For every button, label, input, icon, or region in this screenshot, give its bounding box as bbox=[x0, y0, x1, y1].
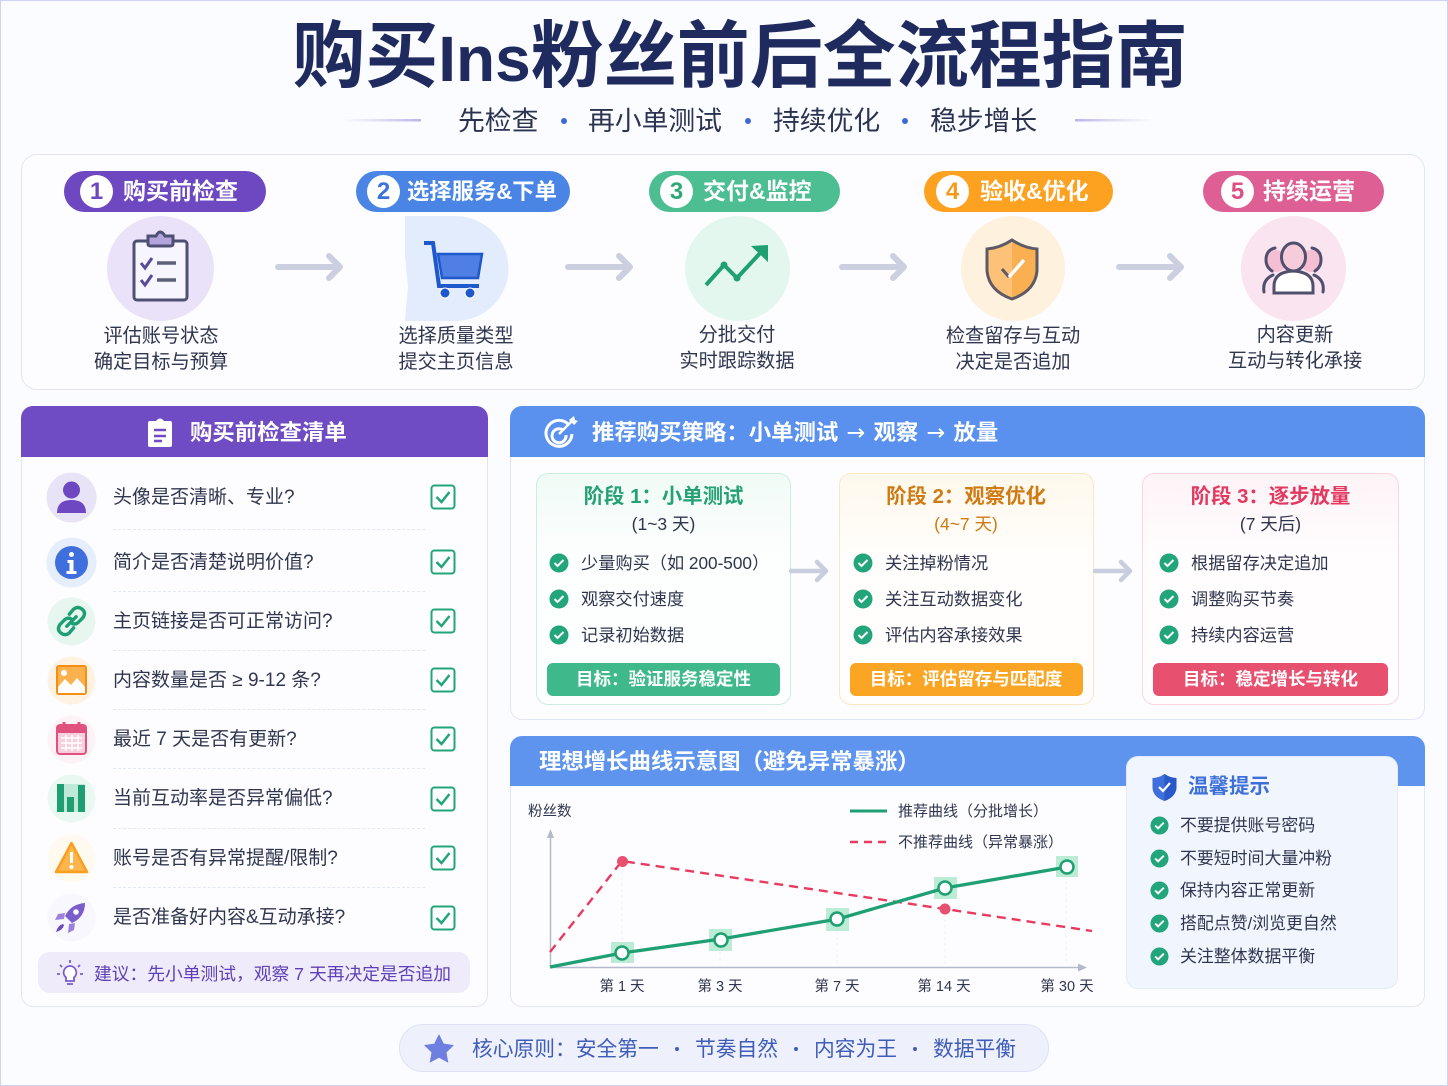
row 2 bbox=[46, 538, 456, 588]
card: stage 2: 阶段 2：观察优化 bbox=[886, 486, 1046, 508]
icon: cart bbox=[405, 216, 508, 321]
strategy header bbox=[510, 406, 1425, 457]
row text: 头像是否清晰、专业? bbox=[113, 487, 295, 508]
card: stage 1 bbox=[536, 473, 791, 705]
row 5 bbox=[48, 716, 456, 764]
row 4 bbox=[48, 656, 456, 704]
icon: bar chart bbox=[48, 774, 96, 822]
step 5 badge bbox=[1203, 171, 1384, 212]
check bbox=[1159, 553, 1179, 573]
row text: 账号是否有异常提醒/限制? bbox=[113, 848, 338, 869]
card: stage 2: (4~7 天) bbox=[934, 514, 998, 534]
check bbox=[1150, 914, 1169, 933]
check bbox=[852, 589, 872, 609]
x axis labels: 第 3 天 bbox=[697, 977, 743, 995]
step 2 badge: 选择服务&下单 bbox=[407, 179, 557, 204]
step 3 caption bbox=[679, 324, 795, 372]
chart header bbox=[510, 736, 1425, 786]
row 3 bbox=[48, 598, 456, 646]
step 1 badge: 购买前检查 bbox=[123, 178, 238, 204]
step 4 badge: 4 bbox=[946, 178, 959, 205]
icon: users bbox=[1241, 216, 1346, 321]
panel: tips: 搭配点赞/浏览更自然 bbox=[1180, 914, 1337, 933]
card: stage 1: (1~3 天) bbox=[632, 514, 695, 534]
footer: core principles bbox=[399, 1024, 1049, 1072]
step 1 badge bbox=[64, 171, 266, 212]
icon: rocket bbox=[55, 903, 85, 933]
row text: 最近 7 天是否有更新? bbox=[113, 729, 297, 750]
axes bbox=[547, 829, 1087, 972]
step 2 badge bbox=[356, 171, 570, 212]
check bbox=[1159, 589, 1179, 609]
icon: star bbox=[423, 1033, 455, 1063]
strategy header: 推荐购买策略：小单测试 → 观察 → 放量 bbox=[592, 420, 998, 446]
arrow bbox=[1116, 253, 1184, 281]
checkbox bbox=[430, 726, 456, 752]
check bbox=[1150, 881, 1169, 900]
card: stage 3: 持续内容运营 bbox=[1191, 624, 1294, 644]
arrow bbox=[565, 253, 633, 281]
row text: 是否准备好内容&互动承接? bbox=[113, 907, 345, 928]
footer: core principles: 核心原则：安全第一 bbox=[472, 1038, 659, 1061]
icon: clipboard small bbox=[148, 418, 172, 447]
row 8 bbox=[55, 903, 456, 933]
step 3 caption: 实时跟踪数据 bbox=[679, 350, 795, 372]
step 3 caption: 分批交付 bbox=[699, 325, 775, 346]
step 4 badge bbox=[924, 171, 1113, 212]
checkbox bbox=[430, 550, 456, 574]
card: stage 3: 目标：稳定增长与转化 bbox=[1183, 669, 1358, 689]
panel: process flow bbox=[21, 154, 1425, 390]
title: 购买Ins粉丝前后全流程指南 bbox=[292, 16, 1188, 97]
advice callout bbox=[38, 952, 470, 993]
step 2 caption: 选择质量类型 bbox=[398, 326, 514, 347]
icon: image bbox=[48, 656, 96, 704]
arrow bbox=[788, 556, 832, 586]
icon: light bulb bbox=[56, 959, 84, 987]
step 4 caption: 检查留存与互动 bbox=[946, 326, 1080, 347]
check bbox=[549, 589, 569, 609]
not recommended curve bbox=[550, 856, 1092, 952]
panel: tips bbox=[1126, 756, 1398, 989]
step 2 caption: 提交主页信息 bbox=[398, 352, 514, 372]
checklist header: 购买前检查清单 bbox=[190, 420, 347, 445]
icon: calendar bbox=[48, 716, 96, 764]
card: stage 1: 目标：验证服务稳定性 bbox=[576, 669, 751, 689]
step 5 badge: 持续运营 bbox=[1263, 178, 1355, 204]
check bbox=[549, 625, 569, 645]
icon: link bbox=[48, 598, 96, 646]
step 3 badge: 3 bbox=[670, 178, 683, 205]
row 1 bbox=[46, 472, 456, 522]
chart header: 理想增长曲线示意图（避免异常暴涨） bbox=[539, 749, 920, 774]
icon: clipboard bbox=[107, 216, 214, 321]
card: stage 3: 根据留存决定追加 bbox=[1191, 552, 1329, 572]
legend: 不推荐曲线（异常暴涨） bbox=[898, 834, 1063, 851]
step 5 badge: 5 bbox=[1231, 178, 1244, 205]
legend: 推荐曲线（分批增长） bbox=[898, 803, 1048, 820]
card: stage 1: 记录初始数据 bbox=[581, 624, 684, 644]
step 4 caption bbox=[946, 326, 1080, 372]
card: stage 3: (7 天后) bbox=[1240, 514, 1301, 534]
row text: 简介是否清楚说明价值? bbox=[113, 552, 314, 573]
check bbox=[1150, 816, 1169, 835]
footer: core principles: 内容为王 bbox=[814, 1038, 897, 1061]
subtitle: 先检查 bbox=[458, 106, 538, 136]
step 1 badge: 1 bbox=[90, 178, 103, 205]
row text: 当前互动率是否异常偏低? bbox=[113, 788, 333, 809]
icon: shield bbox=[961, 216, 1065, 321]
step 2 caption bbox=[398, 326, 514, 372]
card: stage 1: 阶段 1：小单测试 bbox=[584, 486, 743, 508]
step 3 badge: 交付&监控 bbox=[703, 178, 812, 204]
line chart bbox=[510, 786, 1130, 1007]
row 7 bbox=[48, 834, 456, 882]
arrow bbox=[839, 253, 907, 281]
subtitle: 再小单测试 bbox=[588, 106, 722, 136]
card: stage 2: 关注互动数据变化 bbox=[885, 588, 1023, 608]
card: stage 2: 评估内容承接效果 bbox=[885, 624, 1023, 644]
check bbox=[549, 553, 569, 573]
icon: warning bbox=[48, 834, 96, 882]
panel: tips: 不要短时间大量冲粉 bbox=[1180, 849, 1332, 868]
x axis labels bbox=[599, 977, 1094, 995]
checkbox bbox=[430, 786, 456, 812]
icon: avatar bbox=[46, 472, 96, 522]
step 1 caption: 确定目标与预算 bbox=[94, 352, 228, 372]
recommended curve bbox=[550, 856, 1078, 967]
row 6 bbox=[48, 774, 456, 822]
row text: 内容数量是否 ≥ 9-12 条? bbox=[113, 670, 321, 691]
step 1 caption bbox=[94, 326, 228, 372]
step 5 caption bbox=[1228, 324, 1362, 372]
icon: target bbox=[542, 415, 578, 449]
subtitle: 持续优化 bbox=[773, 106, 880, 136]
checkbox bbox=[430, 668, 456, 692]
panel: tips: 保持内容正常更新 bbox=[1180, 881, 1315, 900]
check bbox=[1150, 947, 1169, 966]
checkbox bbox=[430, 846, 456, 870]
footer: core principles: 节奏自然 bbox=[695, 1038, 778, 1061]
checkbox bbox=[430, 484, 456, 510]
check bbox=[852, 553, 872, 573]
card: stage 1: 观察交付速度 bbox=[581, 588, 684, 608]
subtitle bbox=[352, 106, 1144, 136]
check bbox=[852, 625, 872, 645]
x axis labels: 第 7 天 bbox=[814, 977, 860, 995]
x axis labels: 第 30 天 bbox=[1040, 977, 1094, 995]
step 1 caption: 评估账号状态 bbox=[103, 326, 219, 347]
line chart: 粉丝数 bbox=[528, 803, 572, 820]
arrow bbox=[1092, 556, 1136, 586]
icon: shield bbox=[1151, 773, 1178, 803]
subtitle: 稳步增长 bbox=[930, 106, 1037, 136]
step 5 caption: 互动与转化承接 bbox=[1228, 350, 1362, 372]
panel: tips: 不要提供账号密码 bbox=[1180, 816, 1315, 835]
panel: tips: 关注整体数据平衡 bbox=[1180, 947, 1315, 966]
tips heading: 温馨提示 bbox=[1188, 775, 1270, 798]
checklist header bbox=[21, 406, 488, 457]
step 5 caption: 内容更新 bbox=[1257, 325, 1333, 346]
panel: checklist bbox=[21, 406, 488, 1007]
card: stage 2 bbox=[838, 473, 1094, 705]
step 4 caption: 决定是否追加 bbox=[955, 352, 1071, 372]
check bbox=[1150, 849, 1169, 868]
checkbox bbox=[430, 608, 456, 634]
card: stage 3: 调整购买节奏 bbox=[1191, 588, 1294, 608]
card: stage 2: 关注掉粉情况 bbox=[885, 552, 988, 572]
step 4 badge: 验收&优化 bbox=[980, 178, 1089, 204]
legend bbox=[850, 803, 1063, 851]
row text: 主页链接是否可正常访问? bbox=[113, 611, 333, 632]
checkbox bbox=[430, 905, 456, 931]
footer: core principles: 数据平衡 bbox=[933, 1038, 1016, 1061]
arrow bbox=[275, 253, 343, 281]
step 2 badge: 2 bbox=[377, 178, 390, 205]
x axis labels: 第 14 天 bbox=[917, 977, 971, 995]
card: stage 2: 目标：评估留存与匹配度 bbox=[870, 669, 1062, 689]
panel: growth chart bbox=[510, 736, 1425, 1007]
icon: info bbox=[46, 538, 96, 588]
x axis labels: 第 1 天 bbox=[599, 977, 645, 995]
advice callout: 建议：先小单测试，观察 7 天再决定是否追加 bbox=[94, 964, 451, 984]
card: stage 3 bbox=[1142, 473, 1399, 705]
card: stage 3: 阶段 3：逐步放量 bbox=[1191, 486, 1350, 508]
card: stage 1: 少量购买（如 200-500） bbox=[581, 552, 769, 572]
step 3 badge bbox=[649, 171, 840, 212]
check bbox=[1159, 625, 1179, 645]
icon: growth chart bbox=[685, 216, 790, 321]
panel: strategy bbox=[510, 406, 1425, 720]
